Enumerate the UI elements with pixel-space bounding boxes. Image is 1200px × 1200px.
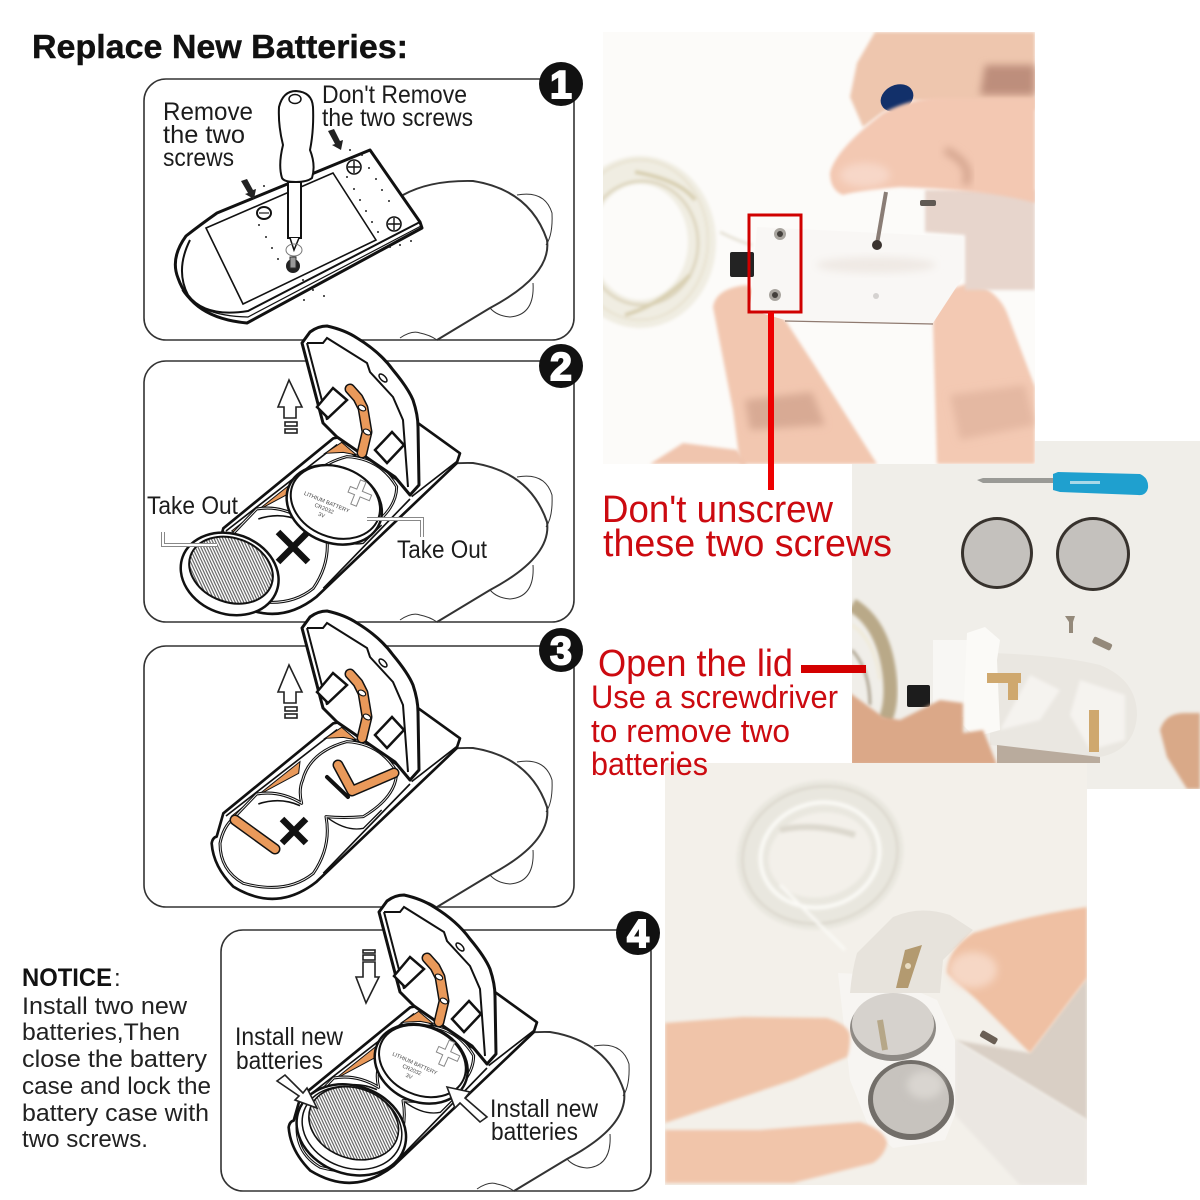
bottom coin battery — [868, 1060, 954, 1140]
screw bottom right — [387, 217, 401, 231]
battery case closed — [175, 150, 422, 323]
notice text: batteries,Then — [22, 1019, 180, 1046]
label remove — [163, 98, 253, 172]
red highlight box — [749, 215, 801, 312]
arrow up — [278, 665, 302, 718]
label install left: Install new — [235, 1023, 344, 1051]
badge 1: 1 — [550, 64, 572, 107]
hand right — [1160, 713, 1200, 789]
photo: batteries and opened lid — [850, 441, 1200, 789]
right hand — [947, 907, 1087, 1053]
loose screws — [1065, 616, 1113, 651]
string light coil — [603, 156, 752, 328]
hand top — [850, 32, 1035, 127]
notice text: two screws. — [22, 1126, 148, 1153]
title: Replace New Batteries: — [32, 28, 408, 65]
arrow to lower battery — [277, 1075, 317, 1108]
label install right: batteries — [491, 1118, 578, 1146]
red caption: open the lid: to remove two — [591, 713, 790, 749]
connector: open the lid — [801, 665, 866, 673]
screw left removed — [257, 207, 271, 219]
notice text: Install two new — [22, 993, 188, 1020]
contact straps — [235, 765, 394, 849]
notice text: close the battery — [22, 1046, 207, 1073]
label don't remove: the two screws — [322, 104, 473, 132]
notice text: case and lock the — [22, 1073, 211, 1100]
screw top right — [347, 160, 361, 174]
connector: screws line — [768, 312, 774, 490]
badge 2 — [539, 344, 583, 389]
photo: removing screws — [572, 32, 1035, 464]
arrow to upper battery — [447, 1087, 487, 1122]
take out left — [147, 492, 238, 545]
opened lid — [850, 910, 973, 993]
take out right — [367, 519, 487, 564]
notice text: : — [114, 965, 121, 992]
badge 4: 4 — [627, 913, 649, 956]
notice text: battery case with — [22, 1100, 209, 1127]
badge 3: 3 — [550, 630, 572, 673]
badge 3 — [539, 628, 583, 673]
top coin battery — [850, 993, 936, 1061]
dotted guide lines — [258, 149, 412, 301]
hand left — [850, 693, 997, 765]
left finger lower — [665, 1122, 887, 1183]
red caption: open the lid: Use a screwdriver — [591, 679, 838, 715]
notice text: NOTICE — [22, 964, 112, 992]
take out left: Take Out — [147, 492, 238, 520]
light coil — [852, 605, 890, 720]
coin battery top: CR2032 — [313, 503, 334, 516]
cross mark — [278, 532, 308, 562]
red caption: don't unscrew — [602, 489, 892, 565]
screwdriver — [279, 91, 314, 273]
label install left — [235, 1023, 344, 1075]
shadow right — [955, 978, 1087, 1120]
red caption: don't unscrew: these two screws — [603, 523, 892, 565]
panel: step 3 empty compartment — [144, 611, 574, 907]
screwdriver — [872, 192, 936, 250]
finger far bottom — [650, 443, 747, 464]
panel: step 1 remove screws — [144, 79, 574, 340]
badge 1 — [539, 62, 583, 107]
coin battery top: LITHIUM BATTERY — [303, 491, 350, 515]
badge 2: 2 — [550, 346, 572, 389]
arrow left screw — [241, 179, 256, 199]
red caption: open the lid — [591, 643, 838, 782]
loose coin batteries — [961, 517, 1130, 591]
arrow down — [356, 950, 379, 1003]
label don't remove: Don't Remove — [322, 81, 467, 109]
label remove: screws — [163, 144, 234, 172]
finger bottom right — [933, 283, 1035, 464]
red caption: open the lid: batteries — [591, 746, 708, 782]
loose screw — [979, 1030, 998, 1045]
coin battery top — [275, 451, 394, 558]
label don't remove — [322, 81, 473, 132]
cross mark — [282, 819, 306, 843]
device with opened lid — [907, 627, 1137, 763]
silver wire coil — [738, 782, 902, 928]
label install right — [490, 1095, 599, 1146]
blue screwdriver — [977, 472, 1148, 495]
label install right: Install new — [490, 1095, 599, 1123]
coin battery bottom — [284, 1069, 419, 1190]
take out right: Take Out — [397, 536, 487, 564]
red caption: don't unscrew: Don't unscrew — [602, 489, 834, 531]
notice text — [22, 964, 211, 1153]
coin battery top: LITHIUM BATTERY — [391, 1052, 438, 1077]
badge 4 — [616, 911, 660, 956]
coin battery top: 3V — [404, 1073, 413, 1081]
label remove: the two — [163, 121, 245, 149]
photo: installing batteries — [665, 763, 1087, 1185]
shadow of hand — [925, 190, 1035, 290]
red caption: open the lid: Open the lid — [598, 643, 793, 685]
coin battery removed — [169, 519, 290, 629]
label remove: Remove — [163, 98, 253, 126]
arrow right screw — [328, 129, 343, 150]
coin battery top: CR2032 — [401, 1064, 422, 1077]
blue handle — [880, 84, 914, 112]
coin battery top — [362, 1010, 480, 1118]
left finger top — [665, 1017, 850, 1123]
finger bottom left — [713, 285, 877, 464]
battery case body — [951, 1038, 955, 1119]
label install left: batteries — [236, 1047, 323, 1075]
arrow up — [278, 380, 302, 433]
panel: step 2 take out — [144, 326, 574, 629]
panel: step 4 install — [221, 895, 651, 1191]
coin battery top: 3V — [317, 512, 326, 520]
battery case white — [730, 227, 963, 324]
index finger — [830, 98, 1035, 203]
